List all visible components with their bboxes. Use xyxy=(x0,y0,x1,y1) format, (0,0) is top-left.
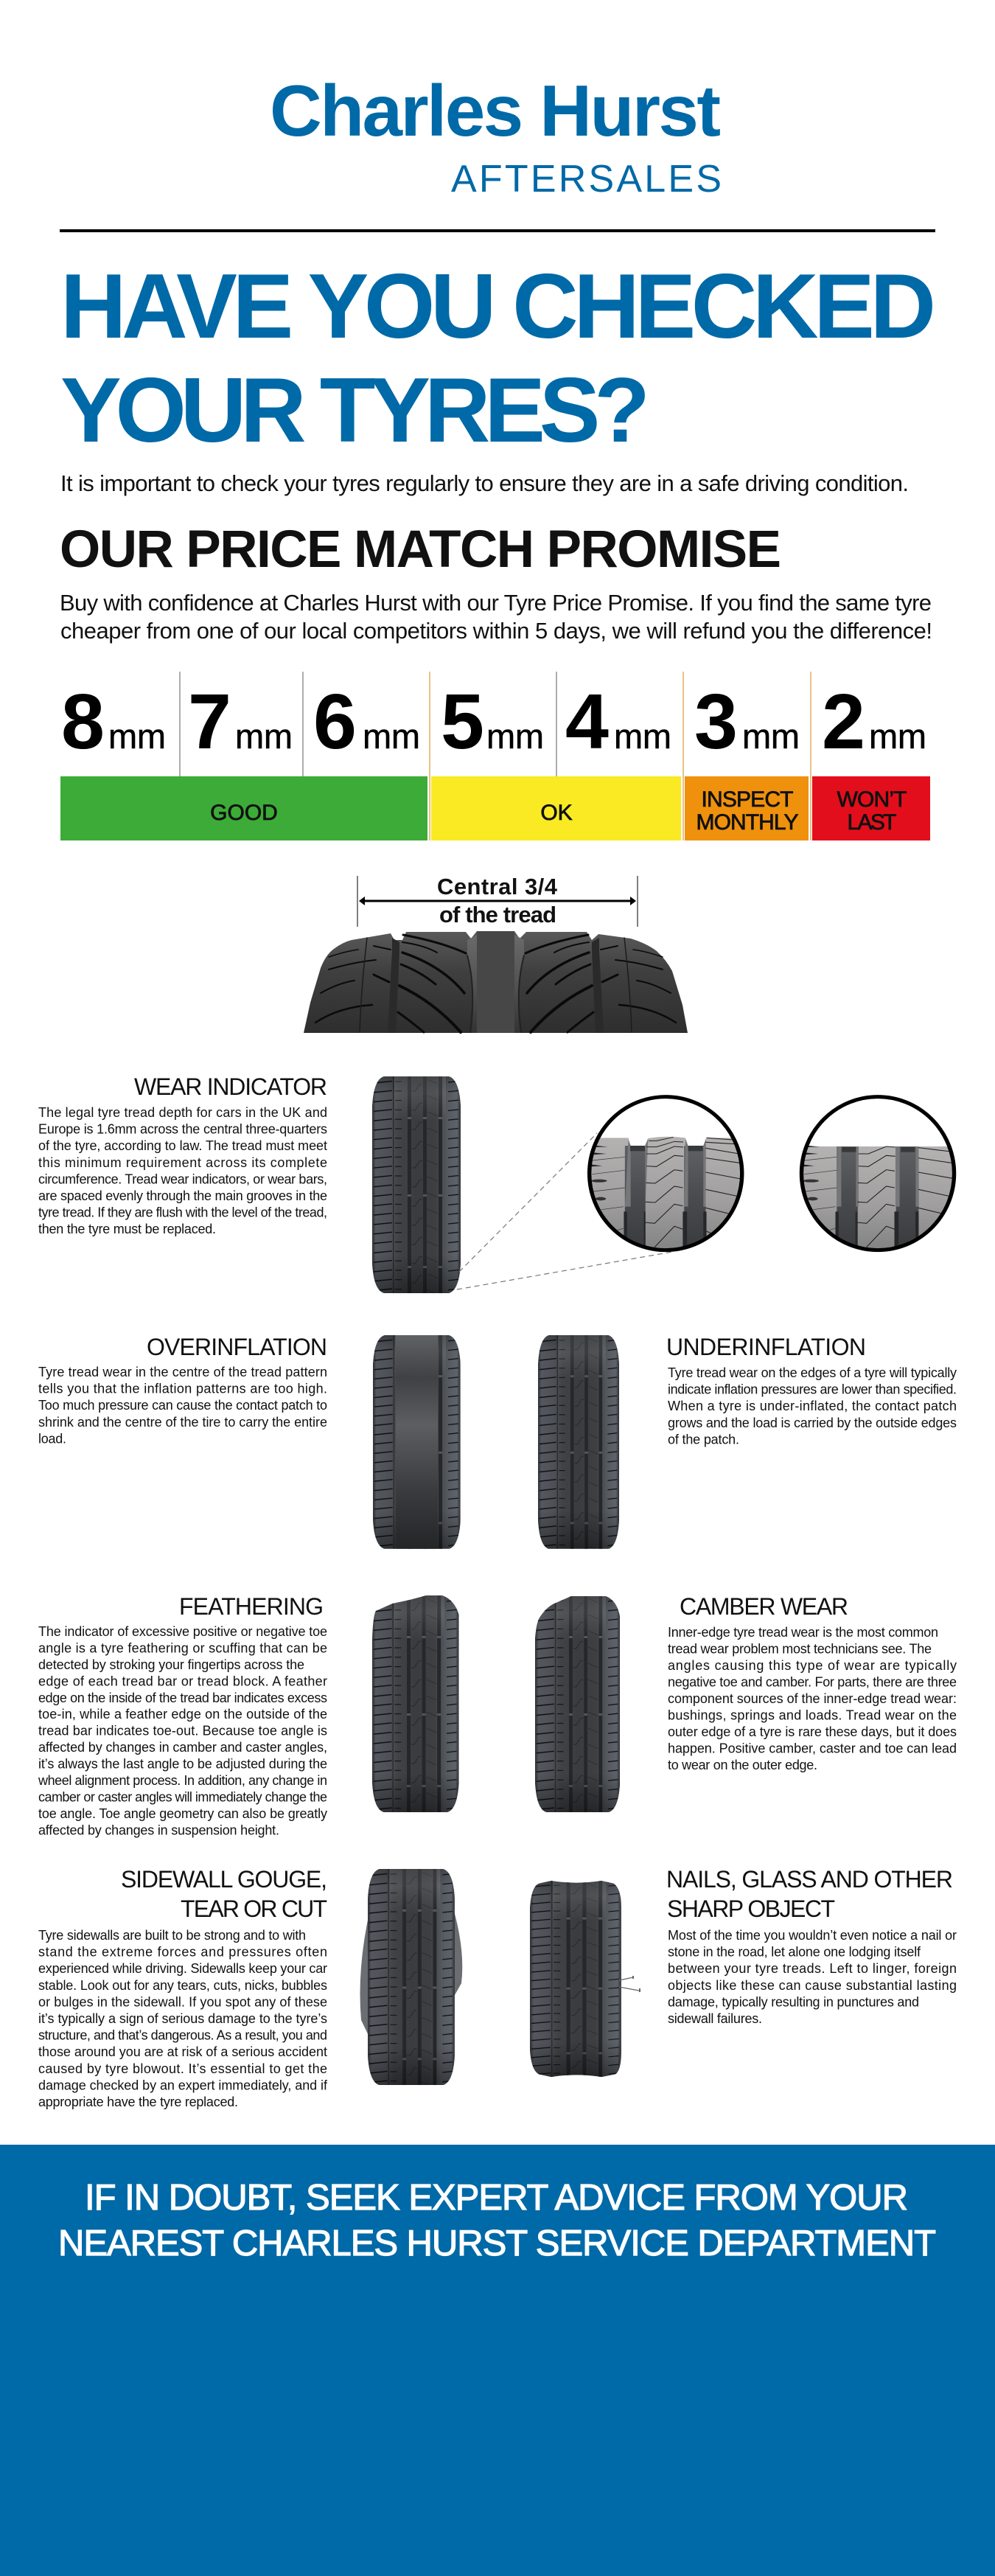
heading: CAMBER WEAR xyxy=(680,1593,848,1620)
heading: price match promise: OUR PRICE MATCH PROMISE xyxy=(60,521,781,579)
heading xyxy=(121,1866,327,1922)
depth numbers: mm xyxy=(869,717,926,756)
body text: sidewall failures. xyxy=(668,2011,762,2026)
depth numbers: 3 xyxy=(694,678,738,765)
heading: TEAR OR CUT xyxy=(181,1896,327,1922)
body text: caused by tyre blowout. It’s essential to get the xyxy=(38,2061,327,2076)
body text: to wear on the outer edge. xyxy=(668,1758,817,1772)
body text: damage checked by an expert immediately, and if xyxy=(38,2078,328,2092)
body text: tells you that the inflation patterns are too high. xyxy=(38,1382,327,1396)
band: good: GOOD xyxy=(210,801,278,825)
depth numbers: 6 xyxy=(313,678,357,765)
band: good xyxy=(60,776,427,840)
icon: feathered tyre xyxy=(372,1595,459,1812)
depth numbers: mm xyxy=(614,717,671,756)
band: inspect monthly xyxy=(685,776,809,840)
title: YOUR TYRES? xyxy=(60,360,650,462)
body text xyxy=(38,1105,327,1236)
body text: objects like these can cause substantial lasting xyxy=(668,1978,957,1993)
body text: stable. Look out for any tears, cuts, nicks, bubbles xyxy=(38,1978,327,1993)
intro text: It is important to check your tyres regularly to ensure they are in a safe driving condition. xyxy=(60,470,909,496)
title: HAVE YOU CHECKED xyxy=(60,256,936,358)
icon: large tyre tread close-up xyxy=(304,931,688,1033)
zoom guide lines xyxy=(457,1133,672,1289)
depth numbers: 5 xyxy=(441,678,484,765)
body text: edge of each tread bar or tread block. A feather xyxy=(38,1674,327,1688)
measure label line two: of the tread xyxy=(439,902,556,927)
measure arrow xyxy=(357,876,638,927)
body text: wheel alignment process. In addition, any change in xyxy=(38,1773,327,1788)
icon: flat tyre xyxy=(530,1881,621,2077)
icon: tyre worn at the edges xyxy=(538,1335,619,1549)
band: ok: OK xyxy=(540,801,573,825)
body text: Europe is 1.6mm across the central three-quarters xyxy=(38,1122,327,1137)
body text: indicate inflation pressures are lower than specified. xyxy=(668,1382,957,1397)
depth numbers: 4 xyxy=(565,678,609,765)
body text: When a tyre is under-inflated, the contact patch xyxy=(668,1399,957,1413)
body text xyxy=(668,1365,957,1447)
depth numbers: mm xyxy=(486,717,544,756)
body text: stone in the road, let alone one lodging itself xyxy=(668,1945,921,1960)
heading xyxy=(666,1866,953,1922)
heading: NAILS, GLASS AND OTHER xyxy=(666,1866,953,1893)
body text: happen. Positive camber, caster and toe can lead xyxy=(668,1741,957,1756)
footer call to action xyxy=(58,2178,936,2263)
body text: outer edge of a tyre is rare these days, but it does xyxy=(668,1724,957,1739)
body text: negative toe and camber. For parts, there are three xyxy=(668,1675,957,1690)
body text: tread wear problem most technicians see. The xyxy=(668,1641,932,1656)
icon: tyre with camber wear xyxy=(535,1595,620,1812)
section: feathering xyxy=(38,1593,459,1837)
body text: Tyre tread wear in the centre of the tread pattern xyxy=(38,1365,327,1379)
tread depth gauge xyxy=(60,672,930,840)
band: ok xyxy=(431,776,681,840)
depth numbers: 2 xyxy=(822,678,865,765)
depth numbers: mm xyxy=(108,717,166,756)
icon: tyre worn in the centre xyxy=(373,1335,461,1549)
section: wear indicator xyxy=(38,1073,959,1293)
body text: or bulges in the sidewall. If you spot any of these xyxy=(38,1994,327,2009)
body text: toe angle. Toe angle geometry can also be greatly xyxy=(38,1806,327,1821)
body text: between your tyre treads. Left to linger, foreign xyxy=(668,1961,957,1976)
icon: nails in tyre xyxy=(619,1976,640,1992)
body text: this minimum requirement across its complete xyxy=(38,1155,327,1170)
logo wordmark: Charles Hurst xyxy=(270,70,721,151)
header rule xyxy=(60,229,935,232)
body text: it’s always the last angle to be adjusted during the xyxy=(38,1757,327,1772)
heading: UNDERINFLATION xyxy=(666,1334,866,1360)
body text: Most of the time you wouldn’t even notice a nail or xyxy=(668,1928,957,1943)
central tread measure xyxy=(357,874,638,927)
body text: stand the extreme forces and pressures often xyxy=(38,1945,327,1960)
body text: tread bar indicates toe-out. Because toe angle is xyxy=(38,1724,327,1738)
body text: Too much pressure can cause the contact patch to xyxy=(38,1398,327,1413)
body text: angles causing this type of wear are typically xyxy=(668,1658,957,1673)
logo sub-brand: AFTERSALES xyxy=(451,158,722,201)
heading: FEATHERING xyxy=(179,1593,324,1620)
body text: it’s typically a sign of serious damage to the tyre’s xyxy=(38,2011,327,2026)
body text: then the tyre must be replaced. xyxy=(38,1222,216,1236)
icon: magnified tread, part worn xyxy=(585,1097,746,1256)
body text: shrink and the centre of the tire to carry the entire xyxy=(38,1415,327,1430)
section: overinflation xyxy=(38,1334,461,1549)
body text: bushings, springs and loads. Tread wear on the xyxy=(668,1708,957,1722)
section: camber wear xyxy=(535,1593,957,1812)
heading: SHARP OBJECT xyxy=(667,1896,835,1922)
band: won't last xyxy=(812,776,930,840)
body text: affected by changes in suspension height. xyxy=(38,1823,279,1837)
price promise text: cheaper from one of our local competitors within 5 days, we will refund you the difference! xyxy=(60,618,932,644)
body text: circumference. Tread wear indicators, or wear bars, xyxy=(38,1172,327,1186)
body text: angle is a tyre feathering or scuffing that can be xyxy=(38,1640,327,1655)
body text: component sources of the inner-edge tread wear: xyxy=(668,1691,957,1706)
body text: damage, typically resulting in punctures and xyxy=(668,1994,919,2009)
body text: experienced while driving. Sidewalls keep your car xyxy=(38,1961,327,1976)
band: inspect monthly: INSPECT xyxy=(702,787,793,812)
body text: grows and the load is carried by the outside edges xyxy=(668,1416,957,1430)
logo: Charles Hurst Aftersales xyxy=(270,70,722,201)
heading: WEAR INDICATOR xyxy=(134,1073,327,1100)
body text: edge on the inside of the tread bar indicates excess xyxy=(38,1691,327,1705)
depth numbers: 8 xyxy=(61,678,105,765)
body text: The legal tyre tread depth for cars in the UK and xyxy=(38,1105,327,1120)
depth numbers: mm xyxy=(742,717,800,756)
body text: The indicator of excessive positive or negative toe xyxy=(38,1624,327,1639)
body text: load. xyxy=(38,1431,66,1446)
heading: SIDEWALL GOUGE, xyxy=(121,1866,327,1893)
measure label: Central 3/4 xyxy=(437,874,558,899)
gauge dividers xyxy=(180,672,811,840)
body text: tyre tread. If they are flush with the level of the tread, xyxy=(38,1205,327,1220)
body text xyxy=(38,1624,327,1837)
body text: Tyre tread wear on the edges of a tyre will typically xyxy=(668,1365,957,1380)
icon: magnified tread, fully worn xyxy=(799,1097,959,1255)
body text: Tyre sidewalls are built to be strong and to with xyxy=(38,1928,306,1943)
body text: affected by changes in camber and caster angles, xyxy=(38,1740,327,1755)
footer call to action: IF IN DOUBT, SEEK EXPERT ADVICE FROM YOUR xyxy=(85,2178,908,2218)
band: inspect monthly: MONTHLY xyxy=(696,810,799,835)
section: sidewall gouge xyxy=(38,1866,462,2109)
band: won't last: LAST xyxy=(848,810,896,835)
body text: detected by stroking your fingertips across the xyxy=(38,1657,304,1672)
icon: tyre with wear bars xyxy=(372,1076,461,1293)
footer band xyxy=(0,2145,995,2576)
depth numbers: 7 xyxy=(188,678,231,765)
body text: toe-in, while a feather edge on the outside of the xyxy=(38,1707,327,1722)
body text: are spaced evenly through the main grooves in the xyxy=(38,1188,327,1203)
footer call to action: NEAREST CHARLES HURST SERVICE DEPARTMENT xyxy=(58,2224,936,2263)
body text xyxy=(668,1928,957,2026)
price promise text xyxy=(60,590,932,644)
body text xyxy=(38,1928,328,2109)
body text: of the patch. xyxy=(668,1432,739,1447)
body text: those around you are at risk of a serious accident xyxy=(38,2044,327,2059)
band: won't last: WON’T xyxy=(837,787,907,812)
body text: of the tyre, according to law. The tread must meet xyxy=(38,1138,327,1153)
depth numbers xyxy=(61,678,926,765)
depth numbers: mm xyxy=(363,717,420,756)
depth numbers: mm xyxy=(235,717,293,756)
body text: camber or caster angles will immediately change the xyxy=(38,1790,327,1805)
title xyxy=(60,256,936,462)
price promise text: Buy with confidence at Charles Hurst with our Tyre Price Promise. If you find the same tyre xyxy=(60,590,932,616)
section: nails and glass xyxy=(530,1866,957,2077)
body text xyxy=(668,1625,957,1772)
heading: OVERINFLATION xyxy=(147,1334,327,1360)
body text: Inner-edge tyre tread wear is the most common xyxy=(668,1625,938,1640)
icon: tyre with bulging sidewall xyxy=(360,1869,462,2085)
section: underinflation xyxy=(538,1334,957,1549)
body text xyxy=(38,1365,327,1446)
body text: appropriate have the tyre replaced. xyxy=(38,2095,238,2109)
body text: structure, and that’s dangerous. As a result, you and xyxy=(38,2028,327,2043)
